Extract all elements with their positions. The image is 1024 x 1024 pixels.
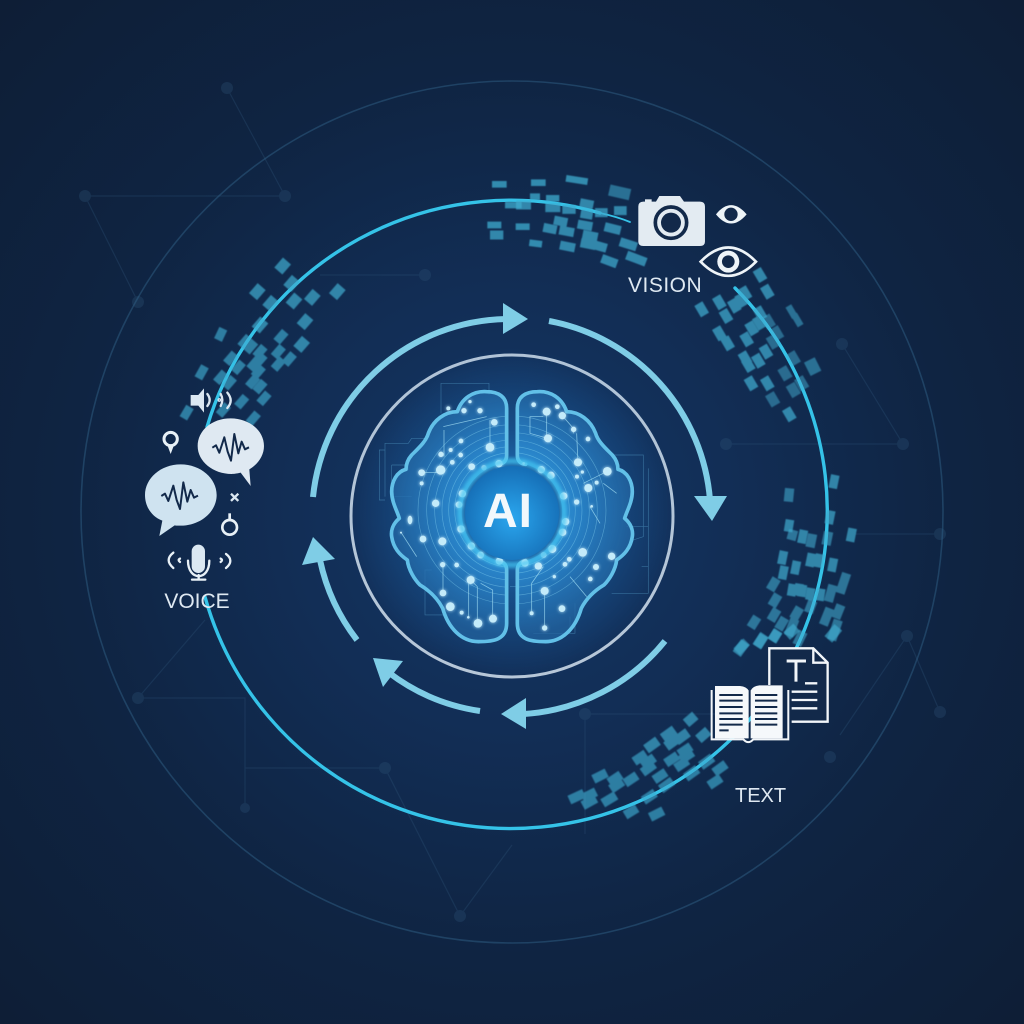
arrow: bottom right arc bbox=[501, 641, 665, 729]
arrow: left arc bbox=[302, 537, 357, 640]
text label: TEXT bbox=[735, 785, 786, 807]
icon: microphone bbox=[169, 545, 230, 580]
outer circuit outlines bbox=[379, 383, 648, 633]
AI core circle bbox=[460, 461, 564, 565]
icon: speech bubble top bbox=[198, 418, 264, 486]
icon: small eye bbox=[716, 205, 747, 223]
icon: open book bbox=[712, 685, 788, 742]
vision label: VISION bbox=[628, 274, 702, 297]
arrow: top right arc bbox=[549, 321, 727, 521]
concentric circuit rings bbox=[418, 416, 505, 604]
faint network lines bbox=[79, 82, 946, 922]
brain bbox=[379, 383, 648, 642]
icon: speech bubble bottom bbox=[145, 464, 217, 536]
icon: document bbox=[769, 648, 828, 722]
data particles: voice stream bbox=[183, 261, 342, 423]
voice group bbox=[145, 388, 264, 580]
hemisphere fill right bbox=[517, 392, 633, 642]
arrow: bottom arc bbox=[373, 658, 480, 711]
arrow: top left arc bbox=[313, 303, 528, 497]
brain outline left bbox=[391, 392, 507, 642]
icon: small cross bbox=[231, 494, 238, 501]
icon: ring node bbox=[222, 513, 237, 535]
glow behind brain bbox=[347, 347, 677, 677]
hemisphere fill left bbox=[391, 392, 507, 642]
brain outline right bbox=[517, 392, 633, 642]
center white ring bbox=[351, 355, 673, 677]
outer thin ring bbox=[81, 81, 943, 943]
icon: speaker bbox=[191, 388, 231, 413]
icon: pin bbox=[164, 432, 177, 454]
data particles: right upper stream bbox=[698, 269, 816, 420]
AI label: AI bbox=[483, 485, 533, 538]
data particles: text stream bbox=[569, 627, 838, 817]
bright orbit arcs bbox=[205, 200, 827, 829]
icon: large eye bbox=[701, 247, 756, 276]
circuit traces bbox=[402, 412, 617, 628]
vision group bbox=[638, 196, 756, 276]
voice label: VOICE bbox=[164, 590, 230, 613]
inner cycle arrows bbox=[302, 303, 727, 729]
data particles: right lower stream bbox=[737, 475, 853, 652]
data particles: vision stream bbox=[487, 178, 646, 264]
neural nodes bbox=[400, 400, 615, 631]
text group bbox=[712, 648, 828, 742]
icon: camera bbox=[638, 196, 705, 246]
